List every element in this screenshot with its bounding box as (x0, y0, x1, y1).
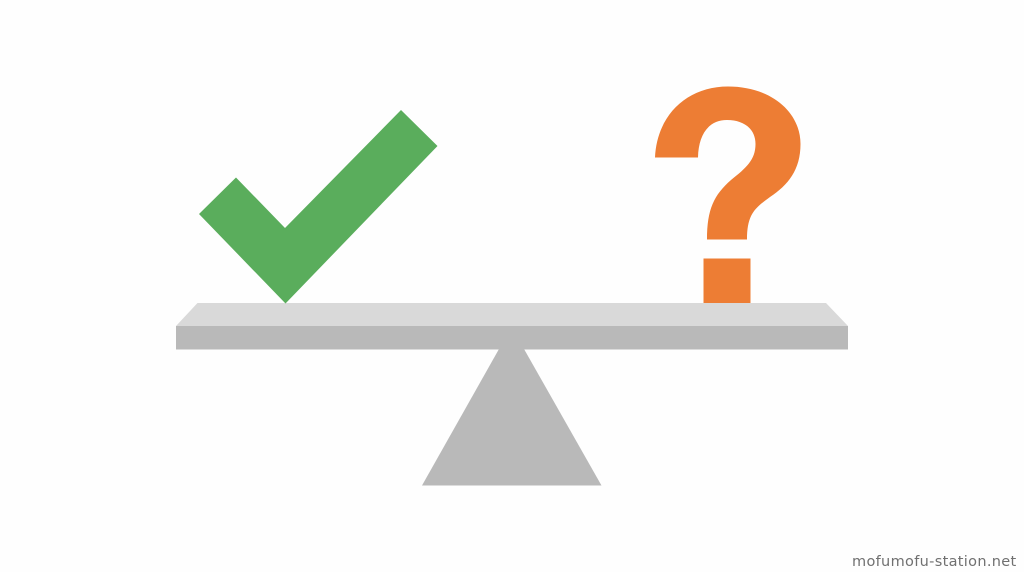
plank front face (176, 326, 848, 350)
question mark dot (704, 258, 750, 303)
question mark curve (655, 86, 800, 240)
seesaw plank (176, 303, 848, 350)
watermark text: mofumofu-station.net (852, 554, 1017, 570)
icon: orange question mark (655, 86, 800, 303)
plank top face (176, 303, 848, 326)
icon: green check mark (199, 110, 438, 304)
fulcrum triangle (422, 349, 602, 486)
